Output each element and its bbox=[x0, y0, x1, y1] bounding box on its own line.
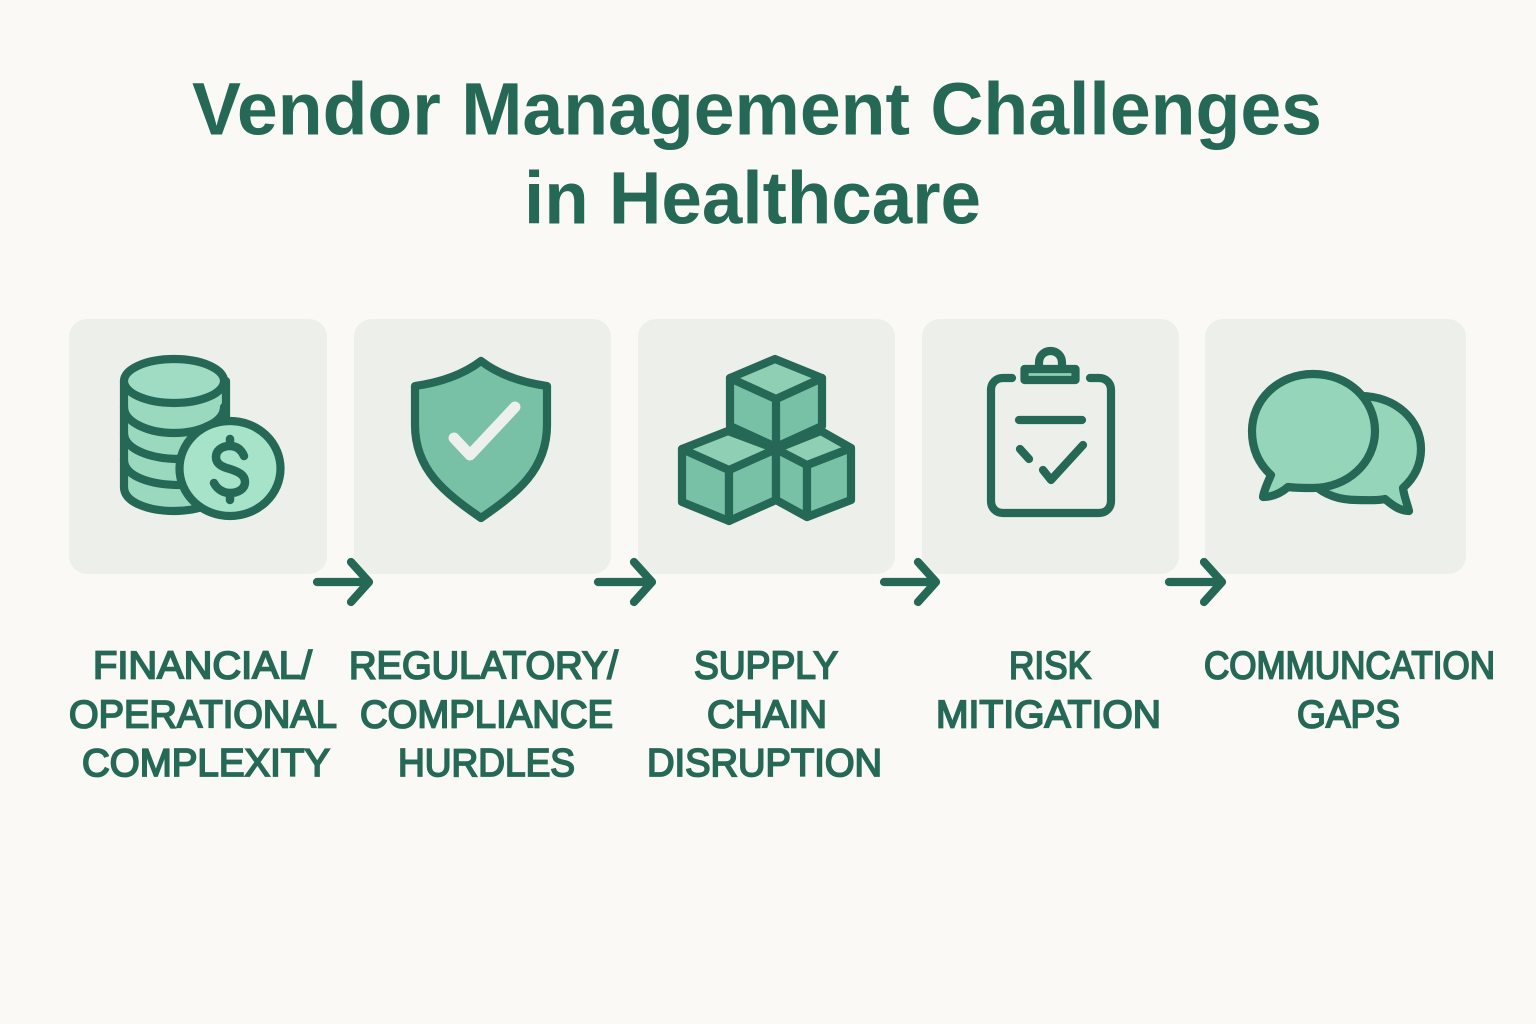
arrow: step 2 to 3 bbox=[598, 562, 652, 602]
panel: risk mitigation bbox=[922, 319, 1179, 736]
label: financial/operational complexity: OPERATIONAL bbox=[69, 694, 337, 736]
panel background bbox=[69, 319, 327, 574]
label: supply chain disruption: CHAIN bbox=[707, 694, 827, 736]
label: supply chain disruption: SUPPLY bbox=[694, 644, 838, 688]
panel: communication gaps bbox=[1204, 319, 1495, 736]
panel: financial/operational complexity bbox=[69, 319, 337, 785]
label: risk mitigation: RISK bbox=[1009, 644, 1091, 688]
label: financial/operational complexity: COMPLEXITY bbox=[82, 742, 330, 785]
title: in Healthcare bbox=[524, 156, 981, 240]
icon: shield with check bbox=[415, 361, 547, 518]
label: regulatory/compliance hurdles: HURDLES bbox=[398, 742, 575, 785]
panel: supply chain disruption bbox=[638, 319, 895, 785]
panel background bbox=[354, 319, 611, 574]
arrow: step 1 to 2 bbox=[317, 562, 369, 602]
panel background bbox=[1205, 319, 1466, 574]
label: regulatory/compliance hurdles: COMPLIANCE bbox=[360, 694, 613, 736]
label: risk mitigation bbox=[936, 644, 1161, 736]
label: communication gaps: COMMUNCATION bbox=[1204, 644, 1495, 688]
icon: speech bubbles bbox=[1252, 374, 1421, 511]
label: financial/operational complexity bbox=[69, 644, 337, 785]
arrow: step 3 to 4 bbox=[884, 562, 936, 602]
title bbox=[192, 68, 1322, 240]
label: regulatory/compliance hurdles bbox=[349, 644, 618, 785]
icon: coin stack with dollar coin bbox=[124, 359, 280, 516]
label: communication gaps bbox=[1204, 644, 1495, 736]
panel background bbox=[922, 319, 1179, 574]
label: regulatory/compliance hurdles: REGULATORY/ bbox=[349, 644, 618, 688]
label: risk mitigation: MITIGATION bbox=[936, 694, 1161, 736]
label: financial/operational complexity: FINANCIAL/ bbox=[93, 644, 312, 688]
panel background bbox=[638, 319, 895, 574]
label: supply chain disruption bbox=[647, 644, 882, 785]
title: Vendor Management Challenges bbox=[192, 68, 1322, 150]
icon: clipboard with check bbox=[991, 351, 1111, 513]
label: communication gaps: GAPS bbox=[1297, 694, 1400, 736]
label: supply chain disruption: DISRUPTION bbox=[647, 742, 882, 785]
panel: regulatory/compliance hurdles bbox=[349, 319, 618, 785]
icon: stacked cubes bbox=[682, 359, 851, 521]
arrow: step 4 to 5 bbox=[1169, 562, 1222, 602]
